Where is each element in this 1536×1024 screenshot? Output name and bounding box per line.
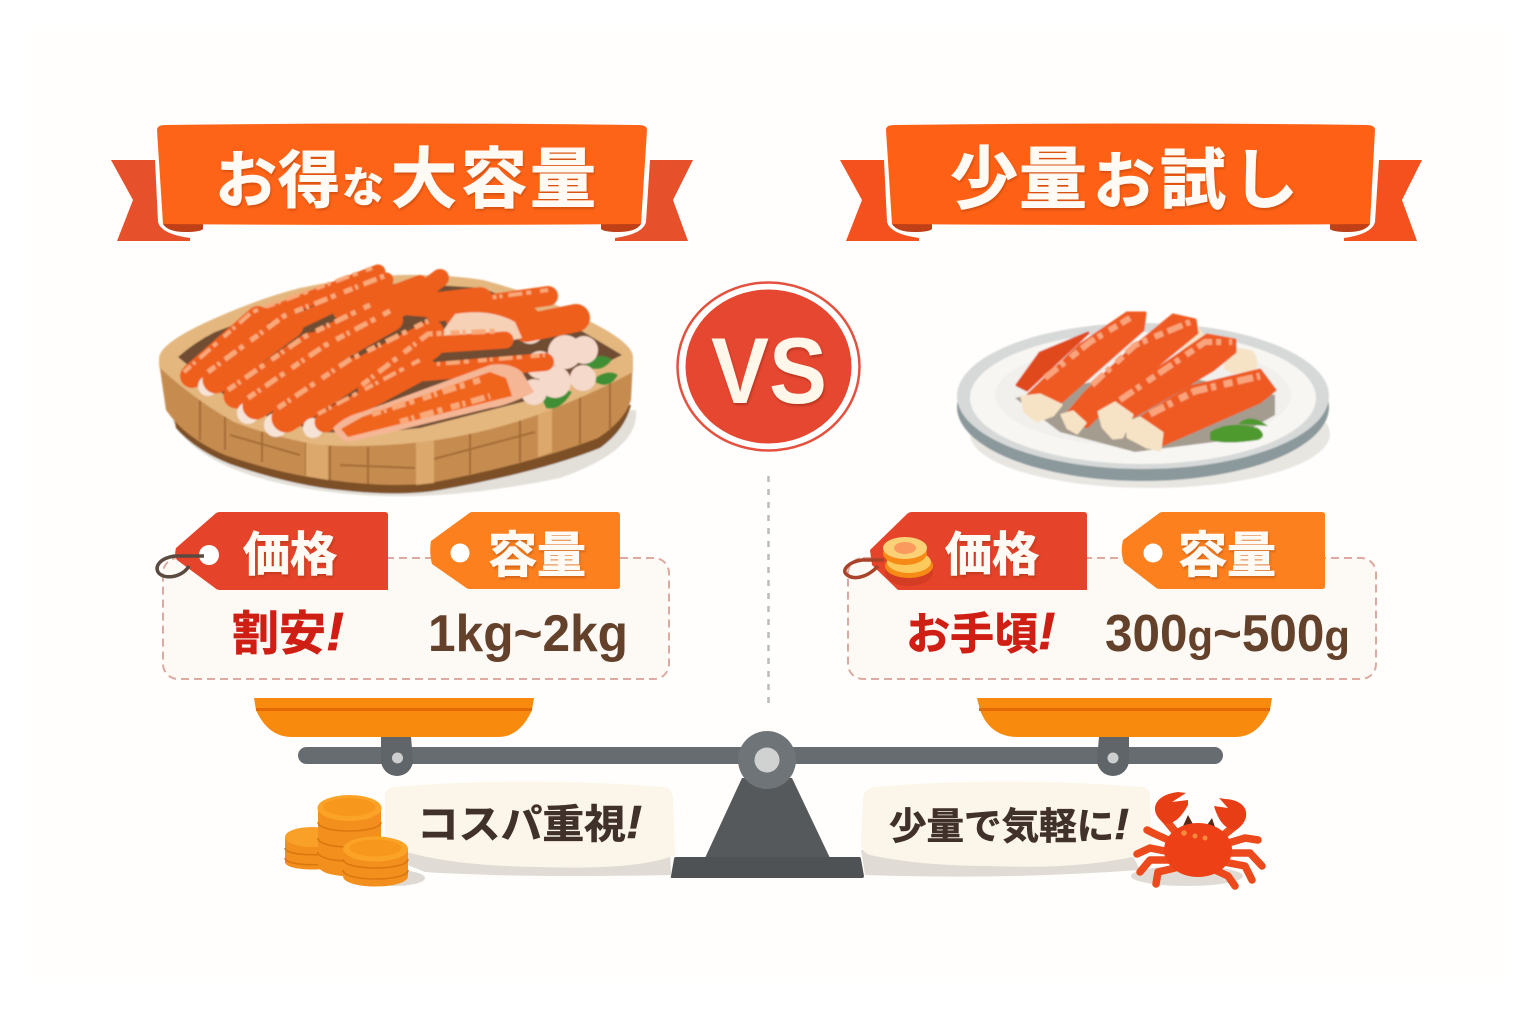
banner title: 少 xyxy=(950,124,1018,223)
plate surface xyxy=(970,332,1316,464)
volume tag xyxy=(1122,512,1325,589)
price value: 割安! xyxy=(232,595,344,664)
banner title: し xyxy=(1232,127,1298,223)
callout text: 少量で気軽に! xyxy=(889,796,1129,850)
balance scale xyxy=(254,698,1272,878)
leaf garnish xyxy=(1210,418,1268,442)
callout: 少量で気軽に xyxy=(861,782,1152,877)
banner body xyxy=(886,124,1375,225)
banner body xyxy=(157,124,647,225)
icon: crab xyxy=(1131,792,1262,886)
crab legs xyxy=(1137,818,1262,886)
badge disc xyxy=(686,290,852,444)
ribbon tails and curls xyxy=(840,160,1422,241)
crab claws xyxy=(1155,792,1246,830)
crab spots xyxy=(1181,830,1208,840)
beam xyxy=(298,747,1223,764)
banner title: 得 xyxy=(278,130,340,220)
left hanger xyxy=(381,737,413,776)
center dotted divider xyxy=(767,476,770,710)
plate rim edge xyxy=(957,333,1329,481)
back crab legs xyxy=(340,278,576,348)
plate well xyxy=(995,343,1291,447)
volume value: 300g~500g xyxy=(1105,605,1350,663)
crab leg meat xyxy=(516,316,598,405)
VS badge xyxy=(678,282,860,450)
pill xyxy=(385,782,675,868)
left pan xyxy=(254,698,534,737)
pill xyxy=(861,782,1152,867)
coin shadow xyxy=(365,870,425,886)
right hanger xyxy=(1097,737,1129,776)
scale stand xyxy=(705,778,830,858)
banner title: 量 xyxy=(530,126,596,222)
banner title: 大 xyxy=(391,126,457,222)
crab shadow xyxy=(1131,866,1243,886)
banner title: な xyxy=(342,154,384,215)
pivot xyxy=(738,731,796,789)
volume tag: 容量 xyxy=(488,516,586,587)
banner title: 試 xyxy=(1160,127,1226,223)
banner: 少量お試し xyxy=(840,124,1422,241)
pill shadow xyxy=(395,850,671,876)
large front crab leg xyxy=(333,364,534,442)
price tag xyxy=(157,512,388,590)
VS text: VS xyxy=(711,318,827,423)
price tag: 価格 xyxy=(945,516,1039,585)
ribbon tails and curls xyxy=(111,160,693,241)
banner title: 量 xyxy=(1019,124,1087,223)
dashed card xyxy=(848,558,1376,679)
tray wall planks xyxy=(200,380,610,484)
volume tag: 容量 xyxy=(1178,516,1276,587)
price value: お手頃! xyxy=(906,598,1055,662)
leaves xyxy=(540,356,618,409)
panel: left info box xyxy=(157,512,669,679)
volume tag xyxy=(430,512,620,589)
pill shadow xyxy=(861,850,1140,877)
callout text: コスパ重視! xyxy=(417,792,642,850)
front stack xyxy=(343,836,408,886)
price tag: 価格 xyxy=(243,516,337,585)
left stack xyxy=(285,827,340,870)
volume value: 1kg~2kg xyxy=(428,605,628,663)
plate rim xyxy=(957,323,1329,469)
banner title: お xyxy=(215,130,277,220)
banner title: お xyxy=(1093,131,1155,221)
banner: お得な大容量 xyxy=(111,124,693,241)
tray wall xyxy=(159,360,633,485)
middle crab legs xyxy=(184,268,545,438)
illustration: wooden tray with crab legs xyxy=(159,268,636,496)
tray inside xyxy=(178,283,622,432)
banner title: 容 xyxy=(461,126,527,222)
scale base xyxy=(671,857,864,878)
tag string xyxy=(845,560,884,578)
tray bands xyxy=(306,404,552,485)
plate crab legs xyxy=(1017,313,1275,450)
plate shadow xyxy=(970,380,1330,488)
illustration: plate with crab legs xyxy=(957,313,1330,488)
price tag xyxy=(845,512,1087,590)
icon: coin stacks xyxy=(285,795,425,886)
dashed card xyxy=(163,558,669,679)
tray rim xyxy=(159,275,633,446)
tray shadow xyxy=(172,410,636,496)
right pan xyxy=(977,698,1272,737)
panel: right info box xyxy=(845,512,1376,679)
crab body xyxy=(1164,823,1232,877)
center stack xyxy=(318,795,382,876)
crab eyes xyxy=(1183,815,1216,830)
food shadow xyxy=(1015,370,1275,452)
tray bottom xyxy=(170,400,631,494)
callout: コスパ重視 xyxy=(385,782,675,876)
icon: coin stack xyxy=(883,537,933,586)
tag string xyxy=(157,556,204,577)
badge ring xyxy=(678,282,860,450)
